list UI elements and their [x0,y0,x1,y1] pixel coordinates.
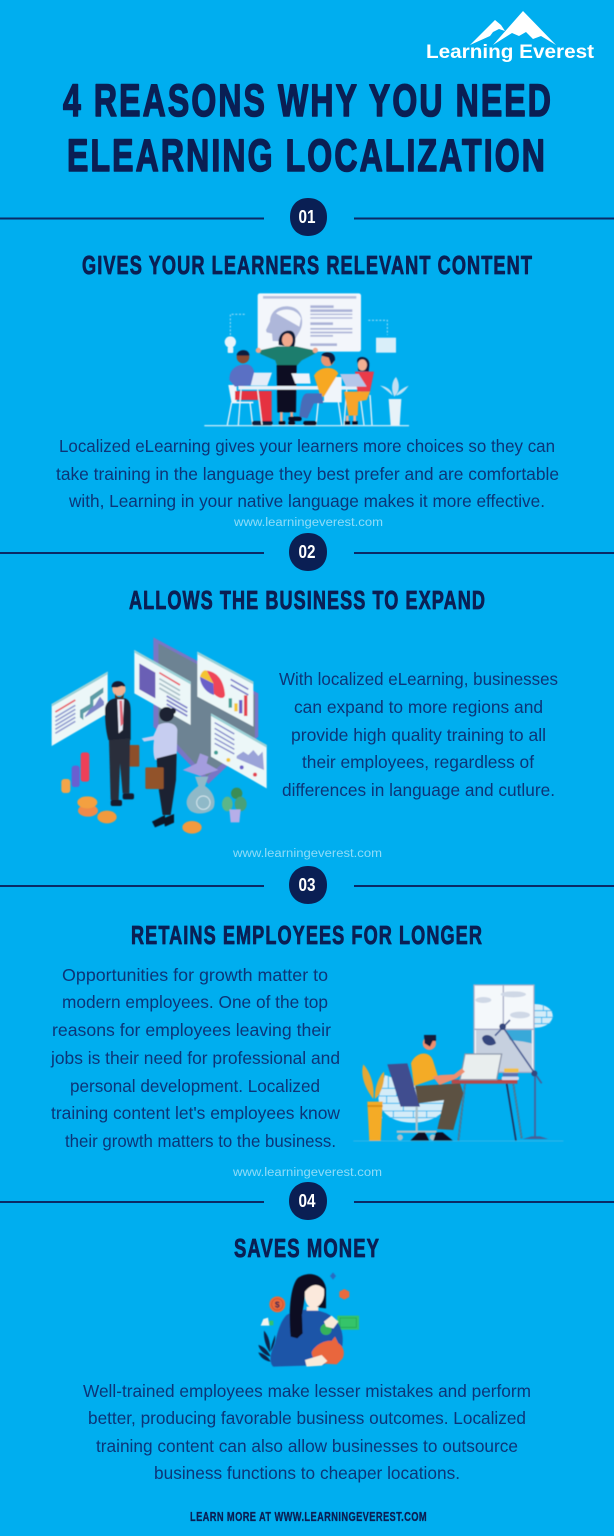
watermark 1: www.learningeverest.com [233,517,383,529]
divider 04 [0,1182,614,1220]
body text: section 3: reasons for employees leaving their [52,1020,331,1040]
divider 01 [0,198,614,236]
divider 02 [0,533,614,571]
floor lamp [482,1020,548,1139]
hand with green coin [320,1316,338,1335]
body text: section 1 [56,436,559,511]
body text: section 1: Localized eLearning gives your learners more choices so they can [59,436,555,456]
potted plant [380,377,409,426]
body text: section 2: their employees, regardless of [302,752,534,772]
body text: section 2: can expand to more regions and [294,697,543,717]
body text: section 3: modern employees. One of the top [62,992,328,1012]
brick walls [377,1004,554,1123]
dashboard panel: area chart [211,713,267,788]
small plant [222,788,247,822]
logo: Learning Everest [426,11,595,63]
far right learner [340,357,374,425]
logo: Learning Everest: Learning Everest [426,42,595,63]
window [474,985,534,1072]
heading: section 4: SAVES MONEY [234,1235,380,1263]
divider 03: 03 [298,875,316,895]
body text: section 4 [83,1381,531,1483]
divider 02: 02 [298,542,316,562]
divider 03 [0,866,614,904]
desk [452,1054,522,1141]
dashboard panel: document [134,650,191,725]
body text: section 4: training content can also allow businesses to outsource [96,1436,518,1456]
watermark 3: www.learningeverest.com [232,1167,382,1179]
body text: section 3: personal development. Localized [70,1076,320,1096]
body text: section 4: better, producing favorable business outcomes. Localized [88,1408,526,1428]
money bag [187,777,215,813]
body text: section 3: their growth matters to the business. [65,1131,336,1151]
body text: section 3 [50,965,340,1151]
body text: section 1: with, Learning in your native language makes it more effective. [68,491,545,511]
illustration: team meeting with presenter [204,293,409,426]
coins [77,796,202,834]
body text: section 2: With localized eLearning, businesses [279,669,558,689]
woman with briefcase [142,707,177,827]
icon: dollar coin: $ [275,1300,280,1310]
man in suit [105,681,139,806]
woman [271,1274,343,1367]
body text: section 3: training content let's employees know [51,1103,340,1123]
illustration: woman with piggy bank [258,1272,359,1367]
presentation board [258,293,361,352]
floor [353,1140,563,1142]
man at desk [387,1035,465,1141]
right learner [288,352,342,425]
title [63,75,553,181]
body text: section 4: business functions to cheaper locations. [154,1463,460,1483]
body text: section 2: provide high quality training to all [291,725,546,745]
body text: section 3: Opportunities for growth matter to [62,965,328,985]
body text: section 2: differences in language and cutlure. [282,780,555,800]
body text: section 1: take training in the language they best prefer and are comfortable [56,464,559,484]
floor [204,425,409,426]
illustration: business handshake with dashboards [52,637,267,834]
monitor [153,637,258,784]
table [238,386,370,425]
piggy bank [305,1337,344,1367]
body text: section 3: jobs is their need for professional and [50,1048,340,1068]
icon: sparkles [330,1272,336,1280]
watermark 2: www.learningeverest.com [232,848,382,860]
divider 04: 04 [298,1191,316,1211]
icon: envelope [368,320,396,353]
body text: section 2 [279,669,558,800]
icon: mountains [470,11,556,45]
icon: small hand and card [261,1318,273,1326]
body text: section 4: Well-trained employees make lesser mistakes and perform [83,1381,531,1401]
illustration: man working at desk [353,985,563,1141]
dashboard panel: pie and bar charts [197,652,253,727]
dashboard panel: line chart [52,672,108,746]
left learner [227,350,273,425]
dark leaves [258,1331,275,1362]
heading: section 3: RETAINS EMPLOYEES FOR LONGER [131,922,483,950]
bar cylinders [61,752,89,793]
icon: light bulb [225,314,245,353]
icon: hexagon coin [339,1289,349,1300]
presenter [256,331,318,425]
icon: banknote [337,1316,359,1330]
potted plant [362,1064,384,1141]
divider 01: 01 [298,207,316,227]
footer: learn more: LEARN MORE AT WWW.LEARNINGEVEREST.COM [190,1510,427,1524]
